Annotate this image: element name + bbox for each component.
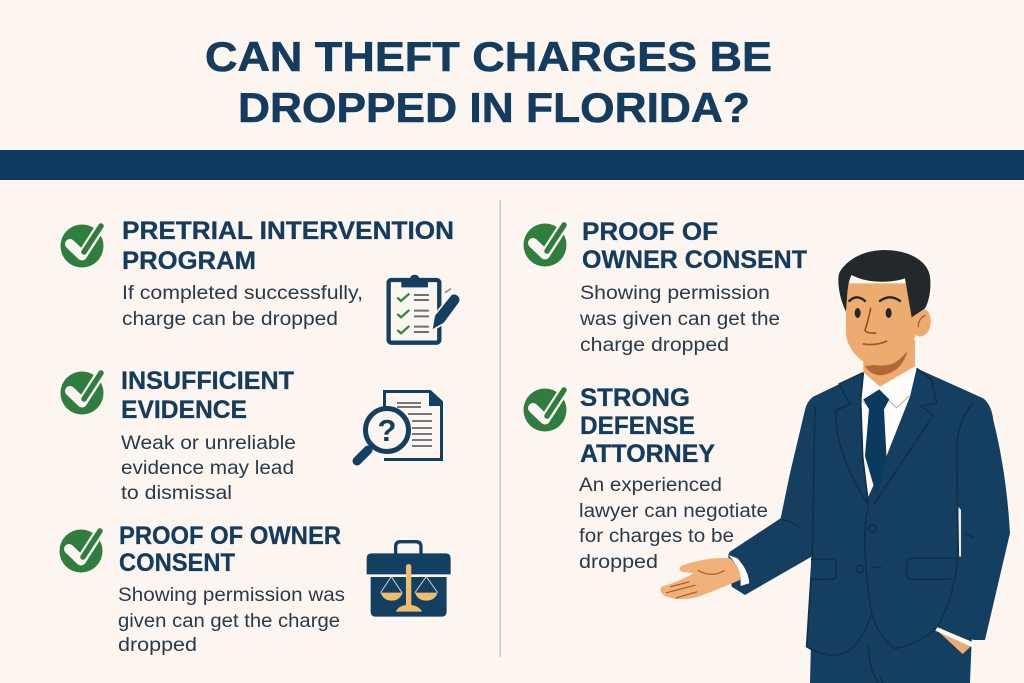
panel: proof of owner consent left bbox=[60, 522, 451, 656]
heading: insufficient evidence bbox=[121, 367, 294, 424]
icon: briefcase with scales bbox=[367, 542, 451, 617]
text: pretrial description bbox=[122, 283, 363, 330]
illustration: attorney in suit bbox=[661, 250, 1010, 683]
text: attorney description bbox=[579, 475, 768, 573]
icon: document and magnifier: ? bbox=[378, 413, 396, 448]
heading: strong defense attorney: DEFENSE bbox=[580, 412, 695, 440]
text: right consent description: charge dropped bbox=[580, 335, 729, 356]
heading: insufficient evidence: INSUFFICIENT bbox=[121, 367, 294, 395]
heading: proof of owner consent: CONSENT bbox=[119, 549, 235, 577]
heading: proof of owner consent right bbox=[582, 218, 807, 274]
title bbox=[205, 33, 772, 131]
text: right consent description: Showing permission bbox=[580, 283, 770, 304]
icon: check bbox=[60, 224, 104, 268]
text: attorney description: An experienced bbox=[579, 475, 722, 496]
title: DROPPED IN FLORIDA? bbox=[238, 84, 750, 131]
icon: check bbox=[524, 388, 566, 432]
heading: proof of owner consent right: PROOF OF bbox=[582, 218, 718, 246]
text: insufficient evidence description: evidence may lead bbox=[121, 458, 294, 479]
text: insufficient evidence description: to dismissal bbox=[121, 483, 232, 504]
text: attorney description: for charges to be bbox=[579, 526, 734, 547]
title: CAN THEFT CHARGES BE bbox=[205, 33, 772, 80]
panel: strong defense attorney bbox=[524, 384, 768, 573]
heading: pretrial: PROGRAM bbox=[122, 247, 256, 275]
icon: check bbox=[60, 372, 104, 414]
heading: strong defense attorney bbox=[580, 384, 715, 468]
text: right consent description bbox=[579, 283, 780, 356]
heading: strong defense attorney: ATTORNEY bbox=[580, 440, 715, 468]
panel: proof of owner consent right bbox=[524, 218, 807, 356]
text: insufficient evidence description: Weak or unreliable bbox=[121, 433, 296, 454]
text: proof of owner consent description: given can get the charge bbox=[118, 611, 340, 632]
text: proof of owner consent description: Showing permission was bbox=[118, 585, 345, 606]
icon: check bbox=[60, 530, 102, 572]
text: proof of owner consent description: dropped bbox=[118, 635, 197, 656]
header band bbox=[0, 150, 1024, 180]
panel: pretrial intervention program bbox=[60, 217, 460, 343]
text: insufficient evidence description bbox=[121, 433, 296, 504]
heading: pretrial bbox=[122, 217, 454, 275]
icon: clipboard bbox=[389, 275, 460, 343]
heading: proof of owner consent: PROOF OF OWNER bbox=[119, 522, 341, 550]
icon: document and magnifier bbox=[357, 391, 442, 461]
panel: insufficient evidence bbox=[60, 367, 442, 504]
heading: insufficient evidence: EVIDENCE bbox=[121, 396, 247, 424]
text: pretrial description: If completed successfully, bbox=[122, 283, 363, 304]
text: proof of owner consent description bbox=[118, 585, 345, 656]
text: attorney description: dropped bbox=[579, 552, 658, 573]
icon: check bbox=[524, 224, 566, 266]
heading: strong defense attorney: STRONG bbox=[580, 384, 690, 412]
heading: pretrial: PRETRIAL INTERVENTION bbox=[122, 217, 454, 245]
text: attorney description: lawyer can negotiate bbox=[579, 501, 768, 522]
heading: proof of owner consent bbox=[119, 522, 341, 577]
heading: proof of owner consent right: OWNER CONSENT bbox=[582, 246, 807, 274]
text: pretrial description: charge can be dropped bbox=[122, 309, 338, 330]
text: right consent description: was given can get the bbox=[579, 309, 780, 330]
